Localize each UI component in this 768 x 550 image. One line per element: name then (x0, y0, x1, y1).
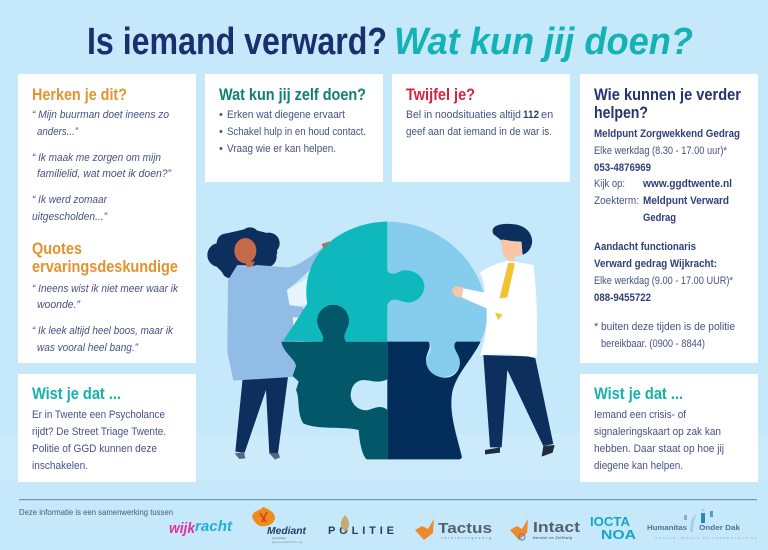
logo: humanitas onder dak: Humanitas (647, 525, 687, 532)
title: Wat kun jij doen? (394, 21, 693, 63)
logo: mediant: geestelijke (272, 536, 287, 540)
panel: wie kunnen je verder helpen: www.ggdtwente.nl (642, 178, 732, 190)
panel: wie kunnen je verder helpen: Gedrag (643, 212, 676, 224)
logo: wijkracht: wijk (169, 520, 196, 537)
logo: politie (328, 515, 394, 537)
panel: wat kun jij zelf doen: Schakel hulp in en houd contact. (227, 126, 366, 138)
panel: twijfel je: en (541, 109, 553, 121)
panel: wie kunnen je verder helpen: Elke werkdag (9.00 - 17.00 UUR)* (594, 275, 734, 287)
panel: wist je dat left (18, 374, 196, 482)
footer line (19, 499, 757, 500)
logo: politie: POLITIE (328, 525, 394, 537)
panel: wie kunnen je verder helpen: Meldpunt Verward (643, 195, 729, 207)
logo: tactus (415, 519, 492, 540)
panel: herken je dit and quotes: “ Ik leek altijd heel boos, maar ik (32, 325, 173, 337)
figure: man shirt and arm, front part (452, 261, 537, 358)
panel: wist je dat right: signaleringskaart op zak kan (594, 426, 721, 438)
panel: wie kunnen je verder helpen: Zoekterm: (594, 195, 639, 207)
figure: woman with blue sweater (207, 227, 331, 460)
panel: wie kunnen je verder helpen: bereikbaar. (0900 - 8844) (601, 338, 705, 350)
panel: wist je dat left: rijdt? De Street Triage Twente. (32, 426, 166, 438)
panel: wat kun jij zelf doen: Vraag wie er kan helpen. (227, 143, 336, 155)
logo: tactus: Tactus (438, 520, 492, 537)
panel: wist je dat right: hebben. Daar staat op hoe jij (594, 443, 724, 455)
panel: twijfel je (392, 74, 570, 182)
logo: mediant (252, 507, 307, 544)
panel: wie kunnen je verder helpen: * (594, 321, 599, 333)
panel: wie kunnen je verder helpen: Kijk op: (594, 178, 625, 190)
panel: herken je dit and quotes: was vooral heel bang.” (37, 342, 139, 354)
title: Is iemand verward? (87, 21, 387, 63)
panel: wat kun jij zelf doen (205, 74, 383, 182)
panel: wist je dat right: Wist je dat ... (594, 384, 683, 403)
panel: wat kun jij zelf doen: • (219, 126, 223, 138)
illustration: puzzle head with two people (207, 222, 555, 460)
panel: wat kun jij zelf doen: Wat kun jij zelf doen? (219, 85, 366, 104)
panel: wie kunnen je verder helpen: Elke werkdag (8.30 - 17.00 uur)* (594, 145, 728, 157)
logo: humanitas onder dak: OPVANG, WONEN EN ONDERSTEUNING (655, 536, 758, 540)
logo: wijkracht: racht (195, 518, 233, 535)
panel: wie kunnen je verder helpen (580, 74, 758, 363)
panel: wie kunnen je verder helpen: Wie kunnen je verder (594, 85, 741, 104)
panel: herken je dit and quotes: familielid, wat moet ik doen?” (37, 168, 172, 180)
panel: wist je dat right: diegene kan helpen. (594, 460, 683, 472)
title (87, 21, 693, 63)
panel: twijfel je: 112 (523, 109, 539, 121)
logo: intact (510, 519, 580, 540)
panel: herken je dit and quotes (18, 74, 196, 363)
panel: herken je dit and quotes: “ Ineens wist ik niet meer waar ik (32, 283, 178, 295)
panel: wie kunnen je verder helpen: Verward gedrag Wijkracht: (594, 258, 717, 270)
panel: wie kunnen je verder helpen: 088-9455722 (594, 292, 651, 304)
panel: herken je dit and quotes: anders...” (37, 126, 79, 138)
panel: twijfel je: Bel in noodsituaties altijd (406, 109, 521, 121)
panel: herken je dit and quotes: “ Ik werd zomaar (32, 194, 108, 206)
panel: herken je dit and quotes: “ Mijn buurman doet ineens zo (32, 109, 169, 121)
panel: herken je dit and quotes: Herken je dit? (32, 85, 127, 104)
footer text: Deze informatie is een samenwerking tussen (19, 508, 173, 517)
panel: wie kunnen je verder helpen: buiten deze tijden is de politie (601, 321, 735, 333)
panel: wist je dat left: Politie of GGD kunnen deze (32, 443, 157, 455)
logo: humanitas onder dak: Onder Dak (699, 525, 740, 532)
panel: wist je dat right: Iemand een crisis- of (594, 409, 687, 421)
puzzle piece: light blue (387, 222, 487, 377)
logo: intact: Herstel en Zelfhulp (533, 536, 572, 540)
panel: wist je dat left: inschakelen. (32, 460, 88, 472)
panel: herken je dit and quotes: “ Ik maak me zorgen om mijn (32, 152, 161, 164)
puzzle piece: teal (283, 222, 424, 342)
panel: wie kunnen je verder helpen: Aandacht functionaris (594, 241, 696, 253)
logo: iocta noa: IOCTA (590, 514, 631, 529)
logo: humanitas onder dak (647, 508, 758, 540)
panel: wie kunnen je verder helpen: Meldpunt Zorgwekkend Gedrag (594, 128, 740, 140)
panel: wat kun jij zelf doen: • (219, 143, 223, 155)
panel: herken je dit and quotes: uitgescholden...” (32, 211, 108, 223)
panel: wie kunnen je verder helpen: 053-4876969 (594, 162, 651, 174)
logo: tactus: verslavingszorg (441, 536, 491, 540)
logo: mediant: gezondheidszorg (272, 540, 302, 544)
panel: twijfel je: geef aan dat iemand in de war is. (406, 126, 552, 138)
logo: intact: Intact (533, 519, 580, 536)
panel: wist je dat right (580, 374, 758, 482)
panel: wist je dat left: Er in Twente een Psycholance (32, 409, 165, 421)
puzzle piece: dark teal (281, 305, 387, 459)
panel: wat kun jij zelf doen: • (219, 109, 223, 121)
figure: man with white shirt, back part (483, 224, 555, 457)
logo: mediant: Mediant (267, 526, 307, 537)
panel: wat kun jij zelf doen: Erken wat diegene ervaart (227, 109, 345, 121)
logo: iocta noa (590, 514, 637, 542)
logo: wijkracht (169, 518, 233, 537)
puzzle piece: navy (387, 342, 481, 459)
panel: wist je dat left: Wist je dat ... (32, 384, 121, 403)
logo: iocta noa: NOA (601, 527, 637, 542)
panel: herken je dit and quotes: Quotes (32, 239, 82, 258)
panel: herken je dit and quotes: woonde.” (37, 299, 81, 311)
panel: wie kunnen je verder helpen: helpen? (594, 103, 648, 122)
panel: herken je dit and quotes: ervaringsdeskundige (32, 257, 178, 276)
panel: twijfel je: Twijfel je? (406, 85, 475, 104)
